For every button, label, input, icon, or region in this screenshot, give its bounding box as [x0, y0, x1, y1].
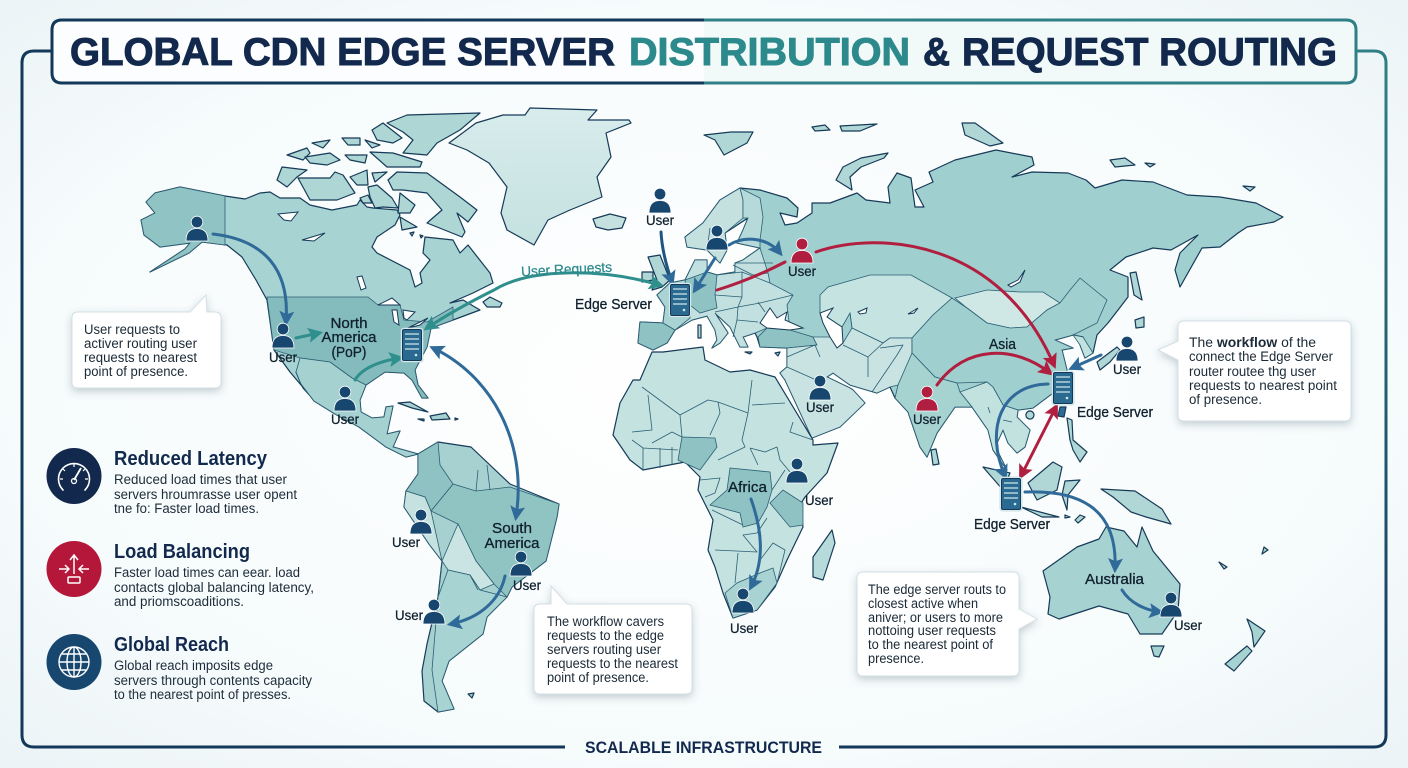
description	[114, 658, 312, 702]
world map	[141, 108, 1283, 712]
borders	[690, 228, 1012, 422]
user: Brazil	[510, 551, 532, 576]
Germany / central shade	[685, 272, 717, 313]
region and server labels	[322, 259, 1153, 588]
callout: South America: servers routing user	[547, 642, 661, 657]
user: India red	[916, 386, 938, 411]
Alaska shade	[141, 187, 225, 272]
arrow: red user to Asia server	[816, 243, 1054, 365]
user: Peru	[410, 509, 432, 534]
arrow: top user to Europe server	[661, 232, 672, 282]
user: Japan	[1116, 336, 1138, 361]
arrow: PoP to South America	[433, 348, 518, 517]
icon: load balancing	[46, 541, 102, 597]
title box	[52, 20, 1356, 83]
label: Africa: Africa	[728, 480, 768, 496]
user: Mexico	[334, 386, 356, 411]
region: Caribbean	[398, 402, 458, 421]
label: South America: America	[484, 536, 540, 552]
Spain shade	[638, 322, 675, 350]
callout: South America: requests to the edge	[547, 628, 664, 643]
user labels: User	[513, 578, 541, 593]
user labels: User	[1113, 362, 1141, 377]
label: Edge Server SE Asia: Edge Server	[974, 517, 1050, 533]
arrow: Alaska to USA	[213, 234, 286, 322]
description: contacts global balancing latency,	[114, 580, 314, 595]
arrow: User Requests	[427, 273, 660, 328]
description: Global reach imposits edge	[114, 658, 273, 673]
callout: right: connect the Edge Server	[1189, 349, 1333, 364]
Mongolia	[955, 290, 1060, 328]
user labels: User	[805, 493, 833, 508]
callout: Indian Ocean: presence.	[868, 651, 924, 666]
callout: right: requests to nearest point	[1189, 378, 1337, 393]
user labels: User	[269, 350, 297, 365]
description: Reduced load times that user	[114, 472, 287, 487]
label: User Requests: User Requests	[521, 259, 612, 279]
arrow: Japan to server	[1072, 355, 1101, 368]
description: Faster load times can eear. load	[114, 565, 300, 580]
arrow: Asia server to SE Asia server	[996, 384, 1048, 476]
callout: right: The workflow of the	[1189, 335, 1316, 350]
user labels	[269, 213, 1202, 636]
panel: Global Reach	[46, 634, 312, 702]
region: Africa	[613, 347, 838, 618]
callout: South America: point of presence.	[547, 670, 649, 685]
heading: Reduced Latency	[114, 448, 268, 470]
SE Asia shade	[960, 382, 1030, 470]
France shade	[657, 280, 690, 330]
user: Australia	[1160, 592, 1182, 617]
label: South America: South	[492, 521, 532, 537]
description: servers through contents capacity	[114, 673, 312, 688]
callout: South America: The workflow cavers	[547, 614, 664, 629]
server: North America	[401, 328, 423, 362]
user labels: User	[646, 213, 674, 228]
Korea	[1073, 335, 1093, 358]
region: North America	[141, 113, 502, 457]
callout: left: activer routing user	[84, 336, 197, 351]
user: Arabia	[809, 375, 831, 400]
Mexico / Central America shade	[296, 358, 418, 457]
server: Europe	[669, 283, 691, 317]
arrow: SE Asia to Australia	[1025, 492, 1115, 569]
footer label: SCALABLE INFRASTRUCTURE	[585, 738, 822, 757]
arrow: within South America	[451, 576, 505, 624]
title text: DISTRIBUTION	[629, 31, 910, 74]
label: Edge Server Europe: Edge Server	[575, 297, 652, 313]
arrow: Scandinavia to red user	[729, 239, 780, 253]
callout: Indian Ocean: The edge server routs to	[868, 582, 1006, 597]
arrow: within Australia	[1122, 590, 1160, 612]
user: USA	[272, 323, 294, 348]
arctic islands	[277, 113, 502, 307]
arrow: US user to PoP	[296, 333, 319, 338]
great lakes	[378, 298, 428, 328]
arrow: India to Asia server	[937, 353, 1050, 385]
callout: Indian Ocean	[857, 572, 1037, 676]
icon: gauge	[46, 448, 102, 504]
Scandinavia shade	[685, 188, 743, 263]
arrow: Scandinavia to server	[695, 258, 715, 290]
arrow: Mexico to PoP	[355, 358, 400, 380]
user: north Atlantic	[649, 188, 671, 213]
arrow: within Africa	[751, 499, 760, 587]
description	[114, 565, 314, 609]
label: North America: America	[322, 330, 377, 346]
callout: left: User requests to	[84, 322, 180, 337]
region: Eurasia	[638, 123, 1283, 524]
Kazakhstan	[820, 275, 952, 343]
description	[114, 472, 297, 516]
inland lakes	[278, 212, 366, 290]
user labels: User	[331, 412, 359, 427]
server: Southeast Asia	[1000, 477, 1022, 511]
panel: Load Balancing	[46, 541, 314, 609]
user: Alaska	[186, 216, 208, 241]
description: tne fo: Faster load times.	[114, 501, 259, 516]
description: and priomscoaditions.	[114, 594, 244, 609]
description: servers hroumrasse user opent	[114, 487, 297, 502]
server: East Asia	[1052, 371, 1074, 405]
arrow: Red double	[1021, 407, 1056, 476]
user labels: User	[730, 621, 758, 636]
callout: right: router routee thg user	[1189, 364, 1316, 379]
label: North America: (PoP)	[332, 345, 366, 361]
callout: left: point of presence.	[84, 364, 188, 379]
user: Scandinavia	[706, 225, 728, 250]
label: Edge Server East Asia: Edge Server	[1077, 405, 1153, 421]
label: North America: North	[330, 316, 368, 332]
callout: Indian Ocean: to the nearest point of	[868, 637, 993, 652]
panel: Reduced Latency	[46, 448, 297, 516]
user labels: User	[913, 412, 941, 427]
icon: globe	[46, 634, 102, 690]
callout: Indian Ocean: aniver; or users to more	[868, 610, 1003, 625]
China shade	[912, 278, 1107, 410]
callout: South America	[534, 586, 692, 694]
region: Greenland and Iceland	[449, 108, 631, 245]
region: Australia and New Zealand	[1043, 527, 1268, 671]
callout: South America: requests to the nearest	[547, 656, 678, 671]
callout: Indian Ocean: closest active when	[868, 596, 978, 611]
user: Chile	[423, 599, 445, 624]
arrow: red user to Europe	[717, 262, 785, 290]
label: North America	[322, 316, 377, 361]
seas	[760, 308, 803, 330]
title text	[70, 31, 1337, 74]
label: Asia: Asia	[989, 337, 1017, 353]
Finland shade	[737, 188, 763, 248]
user labels: User	[1174, 618, 1202, 633]
description: to the nearest point of presses.	[114, 687, 291, 702]
label: South America	[484, 521, 540, 552]
Europe shade	[638, 248, 793, 350]
title text: REQUEST ROUTING	[962, 31, 1337, 74]
heading: Load Balancing	[114, 541, 250, 563]
user icons	[186, 188, 1182, 624]
user labels: User	[806, 400, 834, 415]
label: Australia: Australia	[1085, 572, 1145, 588]
USA shade	[267, 297, 453, 398]
user labels: User	[395, 608, 423, 623]
Middle East shade	[780, 328, 912, 438]
region: South America	[404, 442, 559, 712]
routing arrows	[213, 232, 1160, 624]
user: East Africa	[786, 458, 808, 483]
Eurasia islands	[642, 123, 1255, 524]
user labels: User	[392, 535, 420, 550]
user: South Africa	[732, 588, 754, 613]
user: Russia red	[791, 238, 813, 263]
callout: Indian Ocean: nottoing user requests	[868, 623, 996, 638]
user labels: User	[788, 264, 816, 279]
India shade	[895, 353, 972, 457]
callout: right: of presence.	[1189, 392, 1262, 407]
callout: left	[72, 295, 221, 388]
Turkey	[758, 328, 817, 348]
title text: &	[923, 31, 950, 74]
heading: Global Reach	[114, 634, 229, 656]
callout: left: requests to nearest	[84, 350, 197, 365]
callout: right	[1158, 321, 1351, 421]
title text: GLOBAL CDN EDGE SERVER	[70, 31, 615, 74]
edge servers	[401, 283, 1074, 511]
